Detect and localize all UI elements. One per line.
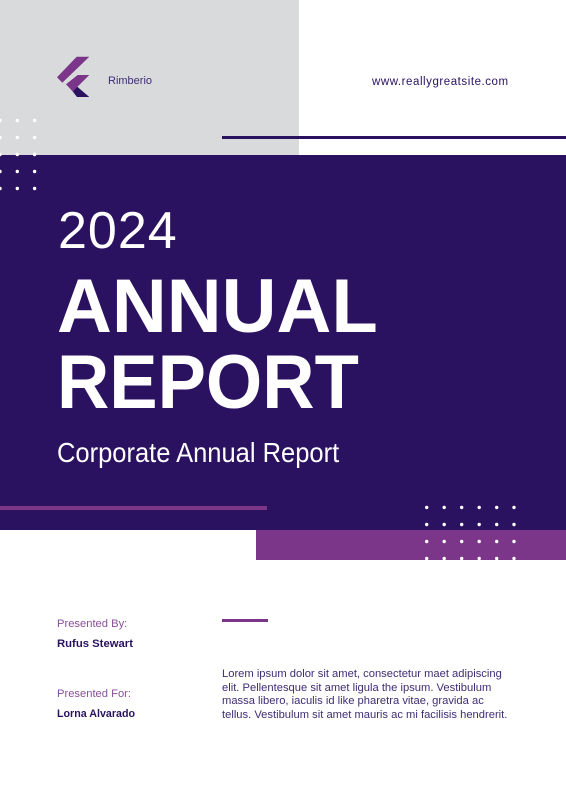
body paragraph: tellus. Vestibulum sit amet mauris ac mi facilisis hendrerit. — [222, 709, 507, 721]
label: presented by: Presented By: — [57, 618, 127, 630]
website: www.reallygreatsite.com — [372, 76, 509, 88]
body paragraph: elit. Pellentesque sit amet ligula the ipsum. Vestibulum — [222, 682, 491, 694]
short accent rule — [222, 619, 268, 622]
title: ANNUAL — [57, 264, 378, 349]
panel: main navy block — [0, 154, 566, 530]
name: Lorna Alvarado: Lorna Alvarado — [57, 708, 135, 720]
body paragraph: massa libero, iaculis id like pharetra vitae, gravida ac — [222, 695, 484, 707]
dot grid: top left — [0, 118, 36, 190]
name: Rufus Stewart: Rufus Stewart — [57, 638, 133, 650]
accent rule in navy block — [0, 506, 267, 510]
panel: grey header block — [0, 0, 299, 155]
body paragraph — [222, 668, 507, 721]
brand name: Rimberio — [108, 75, 152, 87]
panel: magenta lower band — [256, 529, 566, 560]
header rule — [222, 136, 566, 139]
body paragraph: Lorem ipsum dolor sit amet, consectetur maet adipiscing — [222, 668, 502, 680]
title: REPORT — [57, 340, 359, 425]
title — [57, 264, 378, 425]
label: presented for: Presented For: — [57, 688, 131, 700]
subtitle: Corporate Annual Report — [57, 437, 339, 468]
logo icon — [57, 56, 90, 97]
year: 2024 — [58, 202, 178, 260]
dot grid: bottom right — [425, 506, 516, 560]
